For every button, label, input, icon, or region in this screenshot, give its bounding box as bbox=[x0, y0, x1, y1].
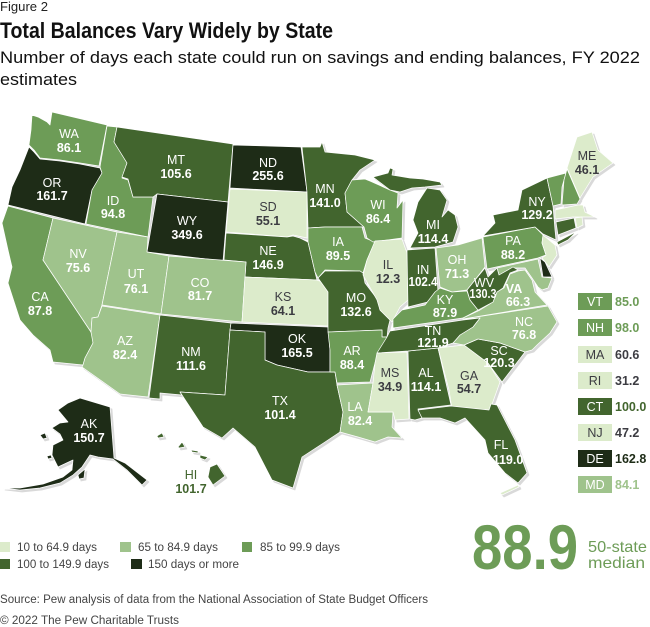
key: DE: DE bbox=[586, 452, 604, 466]
label: OH bbox=[445, 253, 469, 281]
state: NE bbox=[224, 233, 317, 280]
state: WI bbox=[345, 179, 403, 242]
state: ND bbox=[230, 145, 307, 192]
state: FL Keys bbox=[500, 485, 519, 495]
state: KS bbox=[242, 277, 328, 326]
label: CO: CO bbox=[191, 276, 210, 290]
state: OK bbox=[230, 323, 330, 372]
subtitle: estimates bbox=[0, 70, 77, 89]
label: NM bbox=[176, 345, 206, 373]
label: AL: 114.1 bbox=[411, 380, 441, 394]
state: NM bbox=[149, 315, 231, 399]
label: SD bbox=[256, 200, 280, 228]
state: NV bbox=[43, 218, 117, 332]
label: IA: IA bbox=[332, 235, 345, 249]
label: TN bbox=[417, 324, 449, 350]
label: AZ bbox=[113, 334, 137, 362]
key: MD bbox=[578, 476, 639, 493]
label: TN: TN bbox=[425, 324, 441, 338]
label: HI: HI bbox=[185, 468, 197, 482]
label: NC bbox=[512, 315, 536, 342]
label: PA bbox=[501, 234, 525, 262]
label: AR bbox=[340, 344, 364, 372]
state: VA bbox=[463, 270, 547, 319]
state: AK islands bbox=[40, 433, 47, 439]
state: UT bbox=[102, 232, 169, 314]
label: NM: 111.6 bbox=[176, 359, 206, 373]
label: GA: 54.7 bbox=[457, 382, 481, 396]
colour legend bbox=[0, 542, 340, 571]
label: WV: WV bbox=[474, 276, 495, 290]
state: IA bbox=[308, 227, 375, 278]
state: AK bbox=[3, 398, 147, 490]
label: MO bbox=[340, 291, 372, 319]
state: HI Molokai bbox=[191, 450, 198, 453]
state: PA bbox=[483, 227, 546, 269]
label: AK: AK bbox=[81, 417, 98, 431]
state: FL bbox=[418, 404, 527, 483]
label: OK bbox=[281, 332, 313, 360]
label: WV: 130.3 bbox=[470, 287, 497, 301]
label: MT: 105.6 bbox=[160, 167, 192, 181]
label: IA: 89.5 bbox=[326, 249, 350, 263]
state: WV bbox=[467, 267, 518, 310]
state: TX bbox=[180, 330, 343, 488]
label: WA bbox=[57, 127, 81, 155]
label: NV bbox=[66, 247, 90, 275]
label: NE: NE bbox=[259, 244, 277, 258]
label: ME: 46.1 bbox=[575, 163, 599, 177]
label: GA: GA bbox=[460, 369, 479, 383]
label: OR bbox=[36, 176, 68, 203]
state: VT bbox=[547, 173, 566, 206]
label: AK bbox=[73, 417, 105, 445]
state: TN bbox=[377, 318, 480, 353]
label: OK: 165.5 bbox=[281, 346, 313, 360]
label: ID bbox=[101, 194, 125, 221]
label: WY: 349.6 bbox=[171, 228, 203, 242]
median figure: 88.9 bbox=[472, 513, 578, 583]
state: HI Maui bbox=[200, 455, 208, 460]
label: HI bbox=[175, 468, 207, 496]
state: RI bbox=[575, 217, 583, 228]
label: ND: 255.6 bbox=[252, 169, 284, 183]
label: OH: 71.3 bbox=[445, 267, 469, 281]
label: MO: MO bbox=[346, 291, 366, 305]
label: GA bbox=[457, 369, 481, 396]
label: TN: 121.9 bbox=[417, 336, 449, 350]
label: IN: 102.4 bbox=[408, 275, 438, 289]
label: CA bbox=[28, 290, 52, 318]
label: MN: 141.0 bbox=[309, 196, 341, 210]
median caption bbox=[588, 539, 647, 572]
label: NY: NY bbox=[528, 195, 546, 209]
label: IN: IN bbox=[417, 263, 429, 277]
state: MA bbox=[555, 205, 595, 219]
label: AR: 88.4 bbox=[340, 358, 364, 372]
label: CA: CA bbox=[31, 290, 49, 304]
label: IL bbox=[376, 258, 400, 286]
label: MS: MS bbox=[381, 366, 399, 380]
key: MD: MD bbox=[585, 478, 605, 492]
state: MN bbox=[302, 142, 375, 228]
state: Long Island bbox=[557, 232, 576, 245]
subtitle: Number of days each state could run on savings and ending balances, FY 2022 bbox=[0, 48, 640, 67]
key: CT: CT bbox=[587, 400, 604, 414]
label: NY: 129.2 bbox=[521, 208, 553, 222]
label: SC bbox=[483, 344, 515, 370]
label: PA: 88.2 bbox=[501, 248, 525, 262]
label: IA bbox=[326, 235, 350, 263]
label: PA: PA bbox=[505, 234, 522, 248]
key: CT bbox=[578, 398, 646, 415]
label: ID: ID bbox=[107, 194, 119, 208]
label: MI: 114.4 bbox=[418, 232, 448, 246]
state: AK Nunivak bbox=[47, 455, 52, 459]
subtitle bbox=[0, 48, 640, 89]
label: CA: 87.8 bbox=[28, 304, 52, 318]
source note: Source: Pew analysis of data from the National Association of State Budget Officers bbox=[0, 594, 428, 606]
label: MT bbox=[160, 153, 192, 181]
key: DE bbox=[578, 450, 646, 467]
label: KY: KY bbox=[437, 293, 454, 307]
state: MT bbox=[114, 127, 233, 202]
key: NH: NH bbox=[586, 321, 604, 335]
state: CT bbox=[556, 218, 576, 235]
label: OR: OR bbox=[43, 176, 61, 190]
state: MD bbox=[497, 259, 552, 290]
label: NV: NV bbox=[69, 247, 87, 261]
state: MI upper bbox=[373, 168, 442, 192]
label: KY: 87.9 bbox=[433, 306, 457, 320]
label: CO: 81.7 bbox=[188, 289, 212, 303]
state: IN bbox=[407, 248, 438, 307]
state: CO bbox=[161, 256, 246, 322]
label: NV: 75.6 bbox=[66, 261, 90, 275]
legend: 85 to 99.9 days: 85 to 99.9 days bbox=[260, 542, 340, 554]
label: UT: 76.1 bbox=[124, 282, 148, 296]
key: NH bbox=[578, 319, 639, 336]
label: WI: WI bbox=[370, 198, 386, 212]
legend: 100 to 149.9 days: 100 to 149.9 days bbox=[17, 559, 109, 571]
state: AZ bbox=[82, 306, 160, 397]
label: ME bbox=[575, 149, 599, 177]
label: CO bbox=[188, 276, 212, 303]
label: OK: OK bbox=[288, 332, 307, 346]
label: KS bbox=[271, 290, 295, 318]
state: MS bbox=[368, 352, 409, 420]
label: KS: KS bbox=[275, 290, 291, 304]
key: NJ: NJ bbox=[587, 426, 603, 440]
label: MN bbox=[309, 182, 341, 210]
label: MT: MT bbox=[167, 153, 185, 167]
state: ID bbox=[86, 126, 153, 237]
key: VT bbox=[578, 293, 639, 310]
state: SD bbox=[226, 189, 307, 238]
label: FL: FL bbox=[494, 438, 508, 452]
state value labels bbox=[28, 127, 599, 496]
label: NE bbox=[252, 244, 284, 272]
state: DE bbox=[540, 258, 552, 277]
legend: 150 days or more: 150 days or more bbox=[148, 559, 239, 571]
label: UT: UT bbox=[128, 267, 145, 281]
state: AK Kodiak bbox=[78, 469, 85, 479]
key: NJ bbox=[578, 424, 639, 441]
state: NC bbox=[453, 306, 557, 352]
label: AL bbox=[411, 366, 441, 394]
label: WV bbox=[470, 276, 497, 301]
key: MD: 84.1 bbox=[615, 478, 639, 492]
label: OH: OH bbox=[448, 253, 466, 267]
key: CT: 100.0 bbox=[615, 400, 646, 414]
label: NM: NM bbox=[181, 345, 201, 359]
state: WY bbox=[147, 194, 228, 261]
legend: 10 to 64.9 days: 10 to 64.9 days bbox=[17, 542, 97, 554]
label: IL: 12.3 bbox=[376, 272, 400, 286]
label: TX: TX bbox=[272, 394, 289, 408]
label: MS: 34.9 bbox=[378, 380, 402, 394]
state: OR bbox=[8, 147, 102, 224]
state: KY bbox=[393, 288, 478, 328]
label: ME: ME bbox=[578, 149, 596, 163]
median caption: median bbox=[588, 555, 645, 572]
key: VT: 85.0 bbox=[615, 295, 639, 309]
label: FL bbox=[493, 438, 523, 467]
label: ND: ND bbox=[259, 156, 277, 170]
label: WY: WY bbox=[177, 214, 198, 228]
state: AR bbox=[328, 330, 387, 383]
label: ND bbox=[252, 156, 284, 183]
label: KS: 64.1 bbox=[271, 304, 295, 318]
label: AZ: AZ bbox=[117, 334, 133, 348]
label: SC: 120.3 bbox=[483, 356, 515, 370]
state: NY bbox=[483, 178, 556, 240]
map: state shapes bbox=[2, 112, 613, 495]
state: CA bbox=[2, 206, 93, 365]
copyright: © 2022 The Pew Charitable Trusts bbox=[0, 615, 179, 627]
state: OH bbox=[436, 238, 485, 292]
label: AZ: 82.4 bbox=[113, 348, 137, 362]
key: RI: RI bbox=[589, 374, 601, 388]
label: LA: 82.4 bbox=[348, 414, 372, 428]
label: TX: 101.4 bbox=[264, 408, 296, 422]
label: LA: LA bbox=[347, 400, 363, 414]
key: NJ: 47.2 bbox=[615, 426, 639, 440]
state: IL bbox=[363, 239, 408, 322]
key: MA: MA bbox=[586, 348, 605, 362]
state: AL bbox=[408, 348, 451, 420]
label: MI: MI bbox=[426, 218, 440, 232]
label: OR: 161.7 bbox=[36, 189, 68, 203]
state: NH bbox=[562, 169, 580, 205]
label: VA bbox=[506, 282, 530, 309]
median caption: 50-state bbox=[588, 539, 647, 556]
state: HI Oahu bbox=[178, 442, 185, 448]
key: DE: 162.8 bbox=[615, 452, 646, 466]
label: NC: 76.8 bbox=[512, 328, 536, 342]
label: NY bbox=[521, 195, 553, 222]
label: AK: 150.7 bbox=[73, 431, 105, 445]
label: FL: 119.0 bbox=[493, 453, 523, 467]
key: MA: 60.6 bbox=[615, 348, 639, 362]
label: VA: VA bbox=[506, 282, 522, 296]
label: KY bbox=[433, 293, 457, 320]
label: SC: SC bbox=[490, 344, 508, 358]
key: RI bbox=[578, 372, 639, 389]
label: NE: 146.9 bbox=[252, 258, 284, 272]
label: UT bbox=[124, 267, 148, 296]
key: MA bbox=[578, 346, 639, 363]
state: HI Kauai bbox=[157, 433, 164, 438]
label: WA: 86.1 bbox=[57, 141, 81, 155]
label: MS bbox=[378, 366, 402, 394]
state: LA bbox=[337, 383, 402, 442]
state: ME bbox=[567, 132, 613, 198]
state: MI lower bbox=[410, 188, 458, 248]
label: WI: 86.4 bbox=[366, 212, 390, 226]
label: SD: SD bbox=[259, 200, 277, 214]
label: AR: AR bbox=[343, 344, 361, 358]
label: WY bbox=[171, 214, 203, 242]
label: IN bbox=[408, 263, 438, 289]
state: HI Big Island bbox=[208, 464, 225, 485]
label: MO: 132.6 bbox=[340, 305, 372, 319]
label: NC: NC bbox=[515, 315, 533, 329]
label: HI: 101.7 bbox=[175, 482, 207, 496]
state: MO bbox=[318, 271, 390, 337]
label: WA: WA bbox=[59, 127, 79, 141]
state: NJ bbox=[542, 235, 557, 267]
label: WI bbox=[366, 198, 390, 226]
state: WA bbox=[29, 112, 107, 166]
key: VT: VT bbox=[587, 295, 603, 309]
label: SD: 55.1 bbox=[256, 214, 280, 228]
label: AL: AL bbox=[418, 366, 434, 380]
label: IL: IL bbox=[383, 258, 393, 272]
label: MI bbox=[418, 218, 448, 246]
key: NH: 98.0 bbox=[615, 321, 639, 335]
small states key bbox=[578, 293, 646, 493]
key: RI: 31.2 bbox=[615, 374, 639, 388]
label: MN: MN bbox=[315, 182, 335, 196]
state: GA bbox=[438, 345, 500, 410]
state: SC bbox=[464, 339, 525, 382]
label: TX bbox=[264, 394, 296, 422]
title: Total Balances Vary Widely by State bbox=[0, 18, 333, 43]
legend: 65 to 84.9 days: 65 to 84.9 days bbox=[138, 542, 218, 554]
label: ID: 94.8 bbox=[101, 207, 125, 221]
label: VA: 66.3 bbox=[506, 295, 530, 309]
label: LA bbox=[347, 400, 372, 428]
